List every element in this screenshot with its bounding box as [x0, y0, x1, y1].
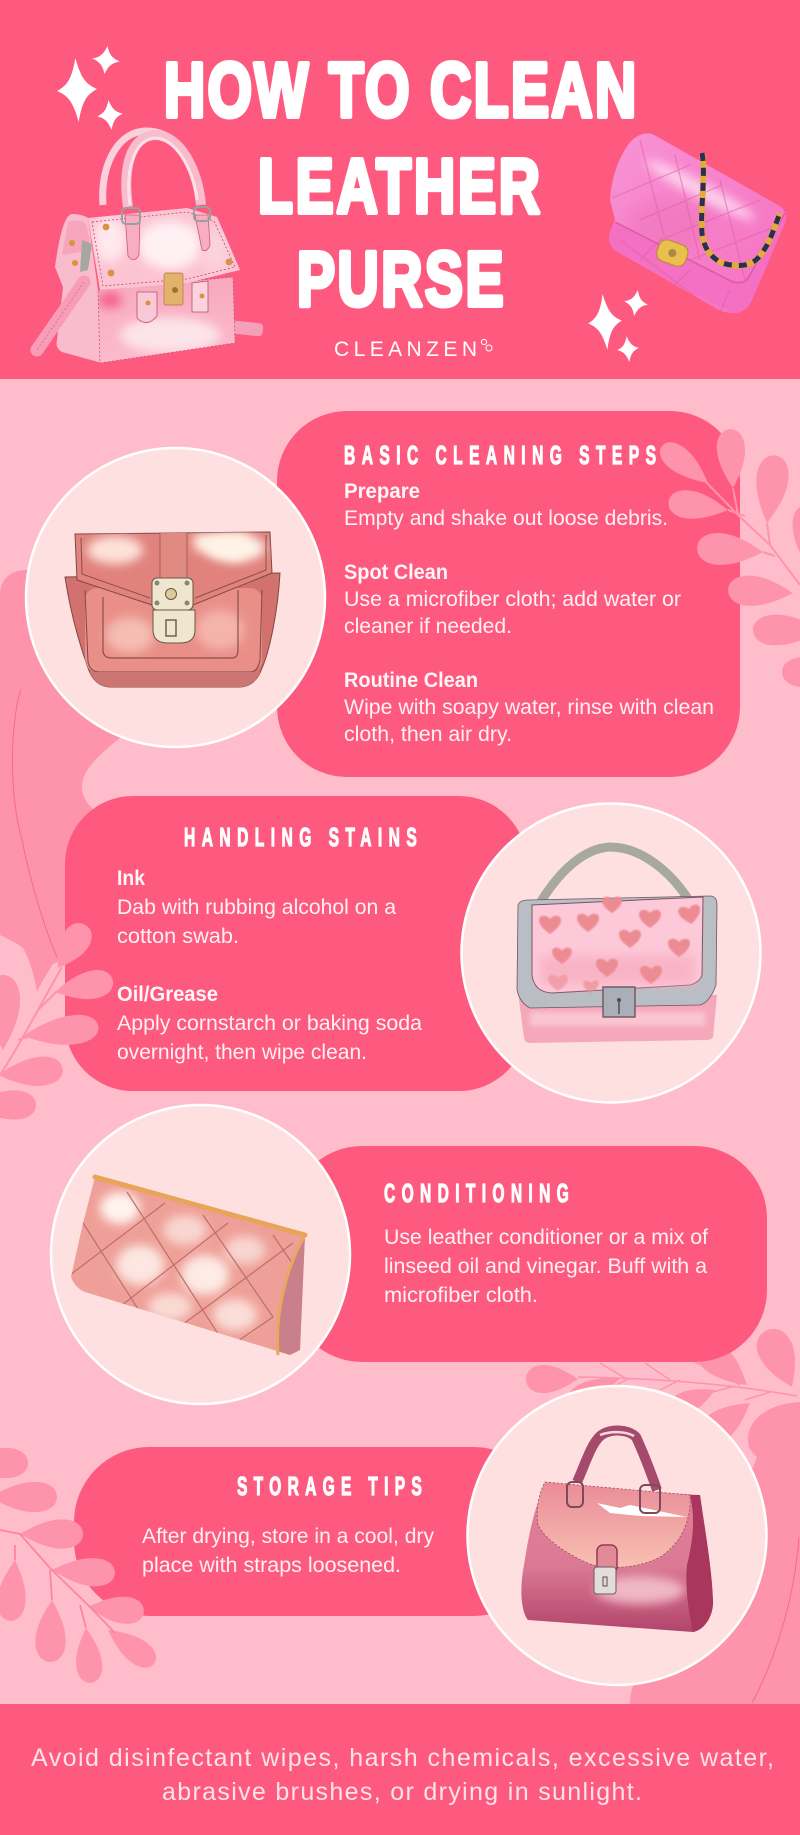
leaves bottom left: [0, 1448, 161, 1684]
panel: handling stains background: [65, 796, 527, 1091]
thin curve right: [752, 1537, 799, 1703]
stain: ink: [117, 866, 396, 948]
step: prepare: [344, 479, 668, 530]
icon: sparkles top left: [55, 45, 124, 131]
illustration circle: brown-pink satchel: [26, 448, 325, 747]
storage body: [142, 1524, 434, 1577]
step: spot clean: cleaner if needed.: [344, 614, 512, 638]
icon: pink handbag in header: [37, 131, 264, 363]
storage body: place with straps loosened.: [142, 1553, 401, 1577]
conditioning body: linseed oil and vinegar. Buff with a: [384, 1254, 707, 1278]
heading: basic cleaning steps: BASIC CLEANING STEPS: [344, 441, 656, 470]
heading: handling stains: HANDLING STAINS: [184, 823, 417, 852]
panel: basic cleaning steps background: [277, 411, 740, 777]
logo: Cleanzen: CLEANZEN: [334, 338, 477, 361]
illustration circle: rose handbag: [468, 1386, 766, 1685]
stain: ink: Ink: [117, 866, 145, 890]
step: prepare: Prepare: [344, 479, 420, 503]
footer warning text: Avoid disinfectant wipes, harsh chemicals, excessive water,: [31, 1744, 774, 1772]
step: spot clean: [344, 560, 681, 638]
illustration circle: pink heart purse: [462, 804, 760, 1102]
illustration circle: quilted clutch: [51, 1105, 350, 1404]
title: PURSE: [297, 237, 503, 323]
leaves behind conditioning panel: [526, 1323, 800, 1452]
step: routine clean: cloth, then air dry.: [344, 722, 512, 746]
footer band: [0, 1704, 800, 1835]
icon: satchel: [65, 530, 280, 692]
conditioning body: [384, 1225, 708, 1307]
icon: rose handbag: [521, 1431, 713, 1632]
heading: conditioning: CONDITIONING: [384, 1179, 569, 1208]
footer warning text: abrasive brushes, or drying in sunlight.: [162, 1778, 642, 1806]
stain: oil and grease: overnight, then wipe clean.: [117, 1040, 367, 1064]
step: spot clean: Spot Clean: [344, 560, 448, 584]
section: basic cleaning steps text: [344, 441, 714, 746]
title: HOW TO CLEAN: [164, 48, 636, 134]
panel: storage tips background: [74, 1447, 549, 1616]
title: [164, 48, 636, 323]
section: conditioning text: [384, 1179, 708, 1307]
panel: conditioning background: [290, 1146, 767, 1362]
leaves top right: [654, 428, 800, 687]
step: prepare: Empty and shake out loose debris.: [344, 506, 668, 530]
thin curve left: [12, 689, 57, 957]
stain: oil and grease: Apply cornstarch or baking soda: [117, 1011, 422, 1035]
background blob bottom right: [630, 1402, 800, 1704]
icon: quilted pink bag with chain in header: [600, 133, 790, 320]
leaves mid left: [0, 918, 116, 1120]
section: handling stains text: [117, 823, 422, 1064]
conditioning body: microfiber cloth.: [384, 1283, 538, 1307]
header band: [0, 0, 800, 379]
background blob left: [0, 570, 120, 992]
stain: oil and grease: [117, 982, 422, 1064]
heading: storage tips: STORAGE TIPS: [237, 1472, 422, 1501]
stain: oil and grease: Oil/Grease: [117, 982, 218, 1006]
title: LEATHER: [258, 144, 540, 230]
step: routine clean: Routine Clean: [344, 668, 478, 692]
step: routine clean: Wipe with soapy water, rinse with clean: [344, 695, 714, 719]
stain: ink: Dab with rubbing alcohol on a: [117, 895, 396, 919]
stain: ink: cotton swab.: [117, 924, 239, 948]
conditioning body: Use leather conditioner or a mix of: [384, 1225, 708, 1249]
icon: quilted clutch: [70, 1177, 310, 1360]
step: routine clean: [344, 668, 714, 746]
step: spot clean: Use a microfiber cloth; add water or: [344, 587, 681, 611]
icon: heart purse: [517, 847, 717, 1043]
footer warning text: [31, 1744, 774, 1806]
storage body: After drying, store in a cool, dry: [142, 1524, 434, 1548]
page background: [0, 379, 800, 1704]
icon: sparkles right: [586, 288, 650, 363]
section: storage tips text: [142, 1472, 434, 1577]
